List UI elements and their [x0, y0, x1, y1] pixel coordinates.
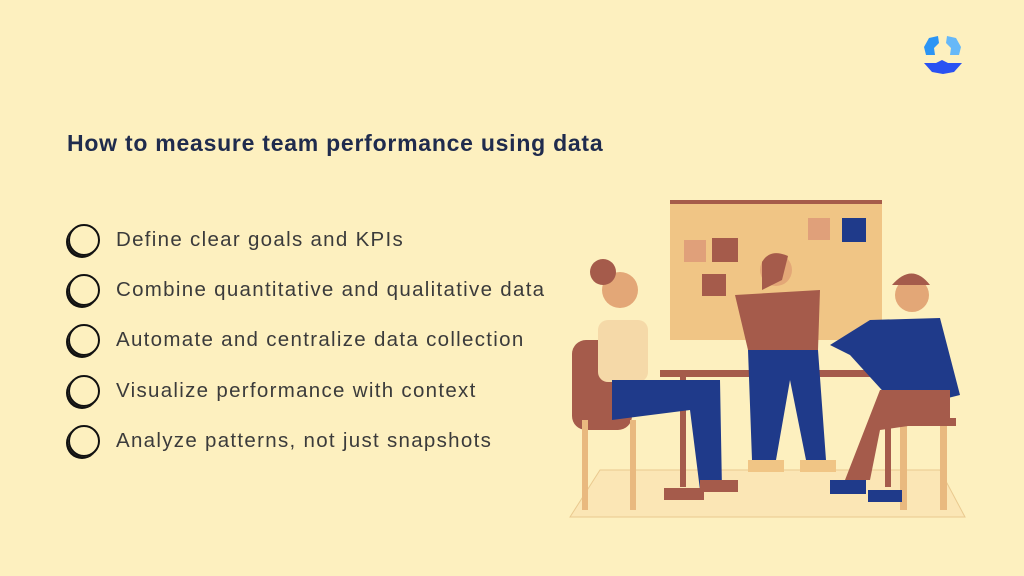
list item 3 — [66, 324, 525, 358]
list item 5 — [66, 425, 492, 459]
title: How to measure team performance using data — [67, 130, 603, 156]
list item 1 — [66, 224, 404, 258]
list item 5: Analyze patterns, not just snapshots — [116, 429, 492, 452]
list item 4 — [66, 375, 477, 409]
table — [660, 370, 912, 377]
list item 2: Combine quantitative and qualitative data — [116, 278, 545, 301]
list item 1: Define clear goals and KPIs — [116, 228, 404, 251]
woman middle — [735, 253, 836, 472]
floor — [570, 470, 965, 517]
board — [670, 200, 882, 340]
logo — [924, 36, 962, 74]
woman left — [572, 259, 738, 510]
list item 2 — [66, 274, 545, 308]
list item 3: Automate and centralize data collection — [116, 328, 525, 351]
man right — [830, 274, 960, 510]
list item 4: Visualize performance with context — [116, 379, 477, 402]
illustration: team meeting — [569, 200, 966, 518]
